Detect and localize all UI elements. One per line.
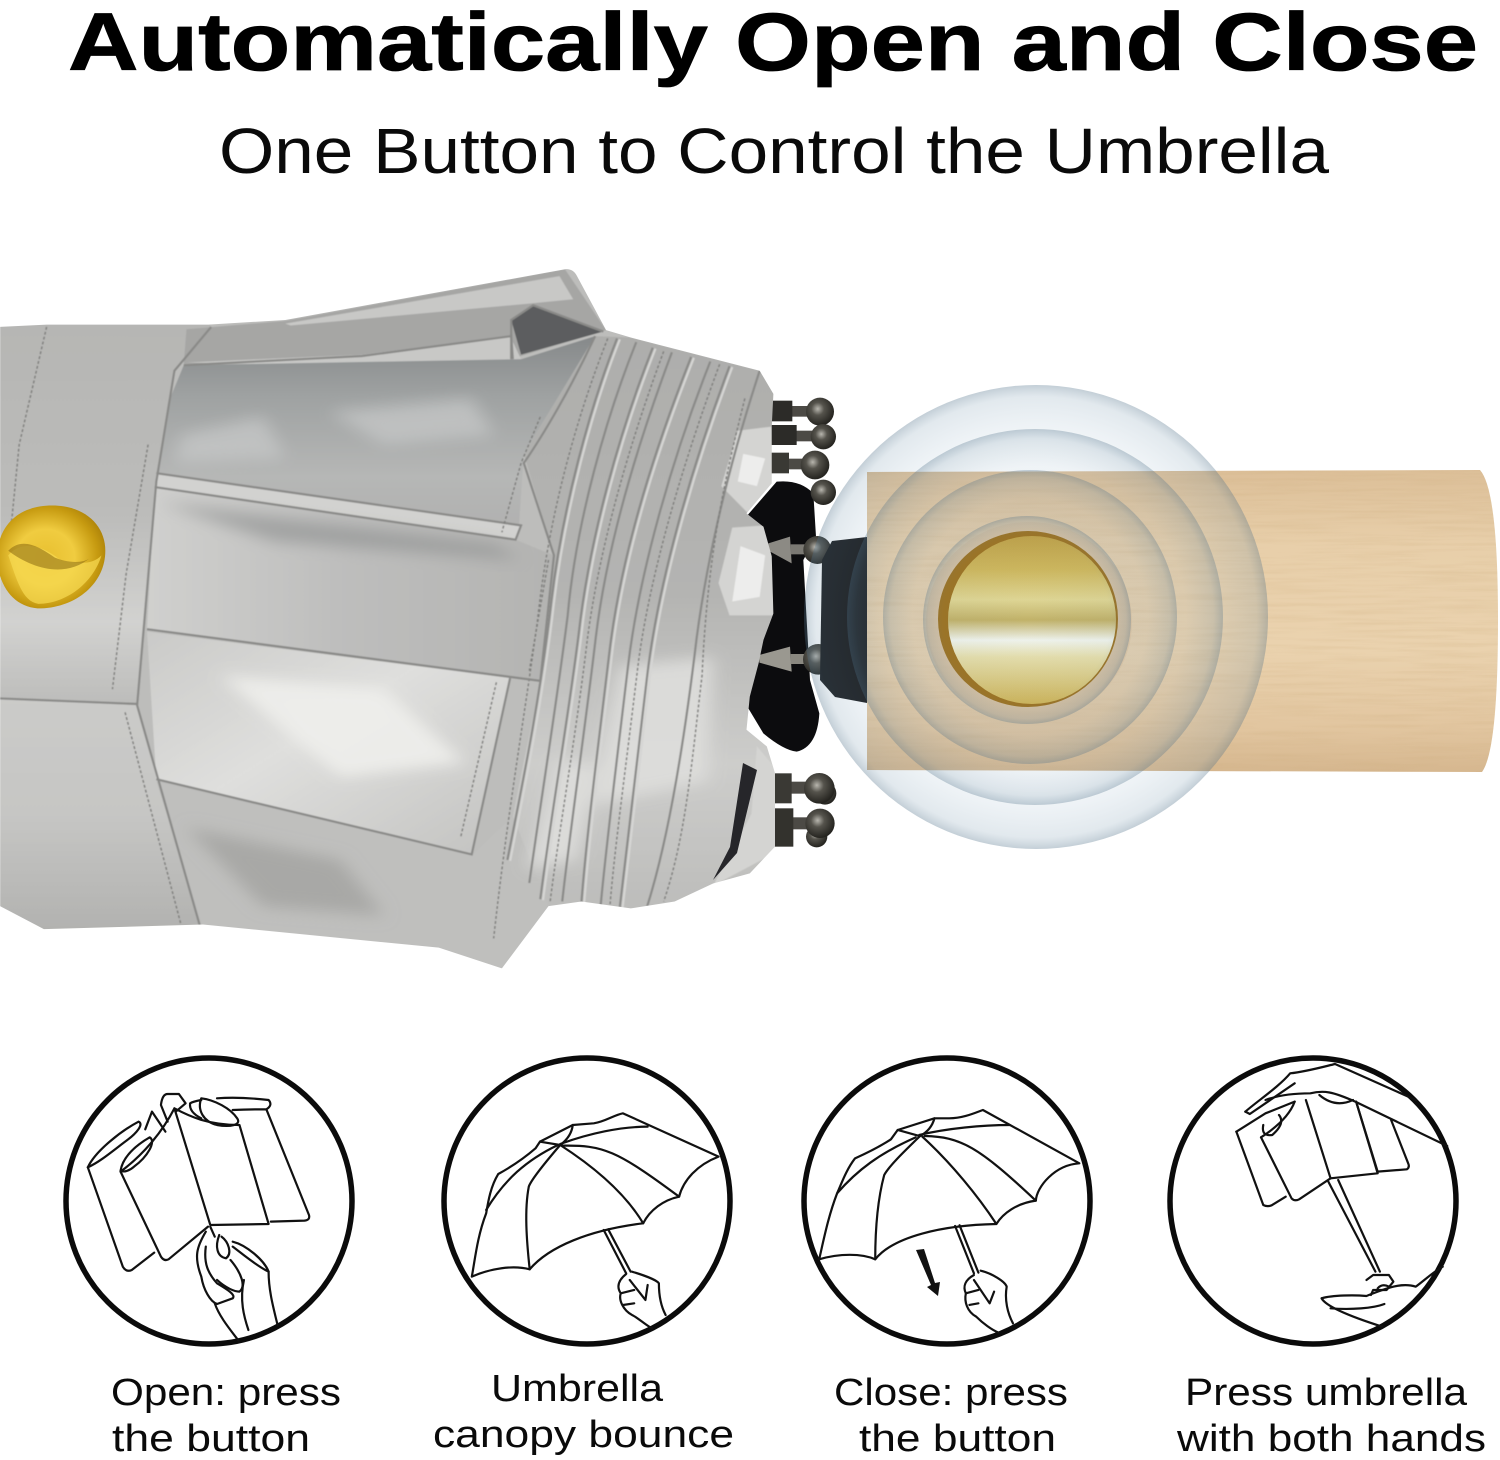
button recess bbox=[926, 522, 1132, 722]
top folded pleat bbox=[184, 269, 606, 364]
step 3: close bbox=[804, 1058, 1090, 1460]
step 1: open bbox=[66, 1058, 352, 1460]
upper flap bbox=[0, 560, 148, 670]
gathered ribs bbox=[514, 336, 774, 837]
folded umbrella between hands bbox=[1236, 1064, 1447, 1327]
wooden handle bbox=[820, 468, 1500, 774]
gold rim bbox=[938, 531, 1118, 707]
label: canopy bounce: canopy bounce bbox=[433, 1414, 734, 1456]
pleat edges and stitching bbox=[0, 305, 603, 927]
pleat C bbox=[147, 632, 510, 854]
dark inner fold bbox=[511, 305, 603, 355]
lower band bbox=[0, 698, 200, 930]
canopy body bbox=[0, 260, 784, 971]
pulse rings around button bbox=[804, 385, 1268, 849]
label: the button: the button bbox=[112, 1418, 310, 1460]
rib light zones bbox=[527, 657, 713, 869]
open umbrella with hand bbox=[819, 1110, 1079, 1333]
bunch highlights bbox=[732, 454, 765, 602]
photo: folded silver umbrella bbox=[0, 260, 784, 971]
rib folds bbox=[494, 336, 760, 938]
pale strip on top pleat bbox=[186, 276, 573, 367]
label: umbrella: Umbrella bbox=[491, 1368, 664, 1410]
open umbrella with hand bbox=[472, 1113, 719, 1328]
icon circle bbox=[1170, 1058, 1456, 1344]
step 4: press with both hands bbox=[1170, 1058, 1486, 1460]
canopy base bbox=[0, 260, 784, 971]
wood grain bbox=[874, 552, 1492, 694]
pleat A fold bbox=[155, 473, 521, 540]
folded umbrella with hand bbox=[88, 1094, 309, 1341]
ball tips bbox=[801, 398, 836, 847]
metal stems bbox=[759, 401, 813, 847]
label: the button: the button bbox=[859, 1418, 1056, 1460]
label: close: Close: press bbox=[834, 1372, 1068, 1414]
icon circle bbox=[804, 1058, 1090, 1344]
fold shadow bbox=[159, 502, 521, 560]
black connector bbox=[820, 537, 867, 703]
gathered tip bunches bbox=[713, 427, 779, 886]
black mesh under canopy bbox=[713, 763, 757, 880]
label: with both hands: with both hands bbox=[1176, 1418, 1486, 1460]
pleat B bbox=[147, 487, 554, 681]
bottom soft shadow bbox=[186, 828, 384, 915]
pleat A highlights bbox=[176, 398, 494, 463]
arrow: pull down bbox=[916, 1249, 940, 1296]
icon circle bbox=[444, 1058, 730, 1344]
gold snap button bbox=[0, 506, 105, 608]
label: press umbrella: Press umbrella bbox=[1185, 1372, 1468, 1414]
black hub bbox=[743, 481, 819, 752]
label: open: Open: press bbox=[111, 1372, 341, 1414]
pleat C soft highlights bbox=[219, 675, 466, 777]
step 2: canopy bounce bbox=[433, 1058, 734, 1456]
gold button bbox=[948, 536, 1116, 704]
main pleat A bbox=[156, 336, 595, 537]
wood cylinder bbox=[867, 470, 1498, 772]
hub and rib tips behind canopy bbox=[743, 398, 836, 847]
icon circle bbox=[66, 1058, 352, 1344]
subtitle: One Button to Control the Umbrella bbox=[219, 115, 1329, 187]
bottom pleat bbox=[156, 781, 549, 971]
